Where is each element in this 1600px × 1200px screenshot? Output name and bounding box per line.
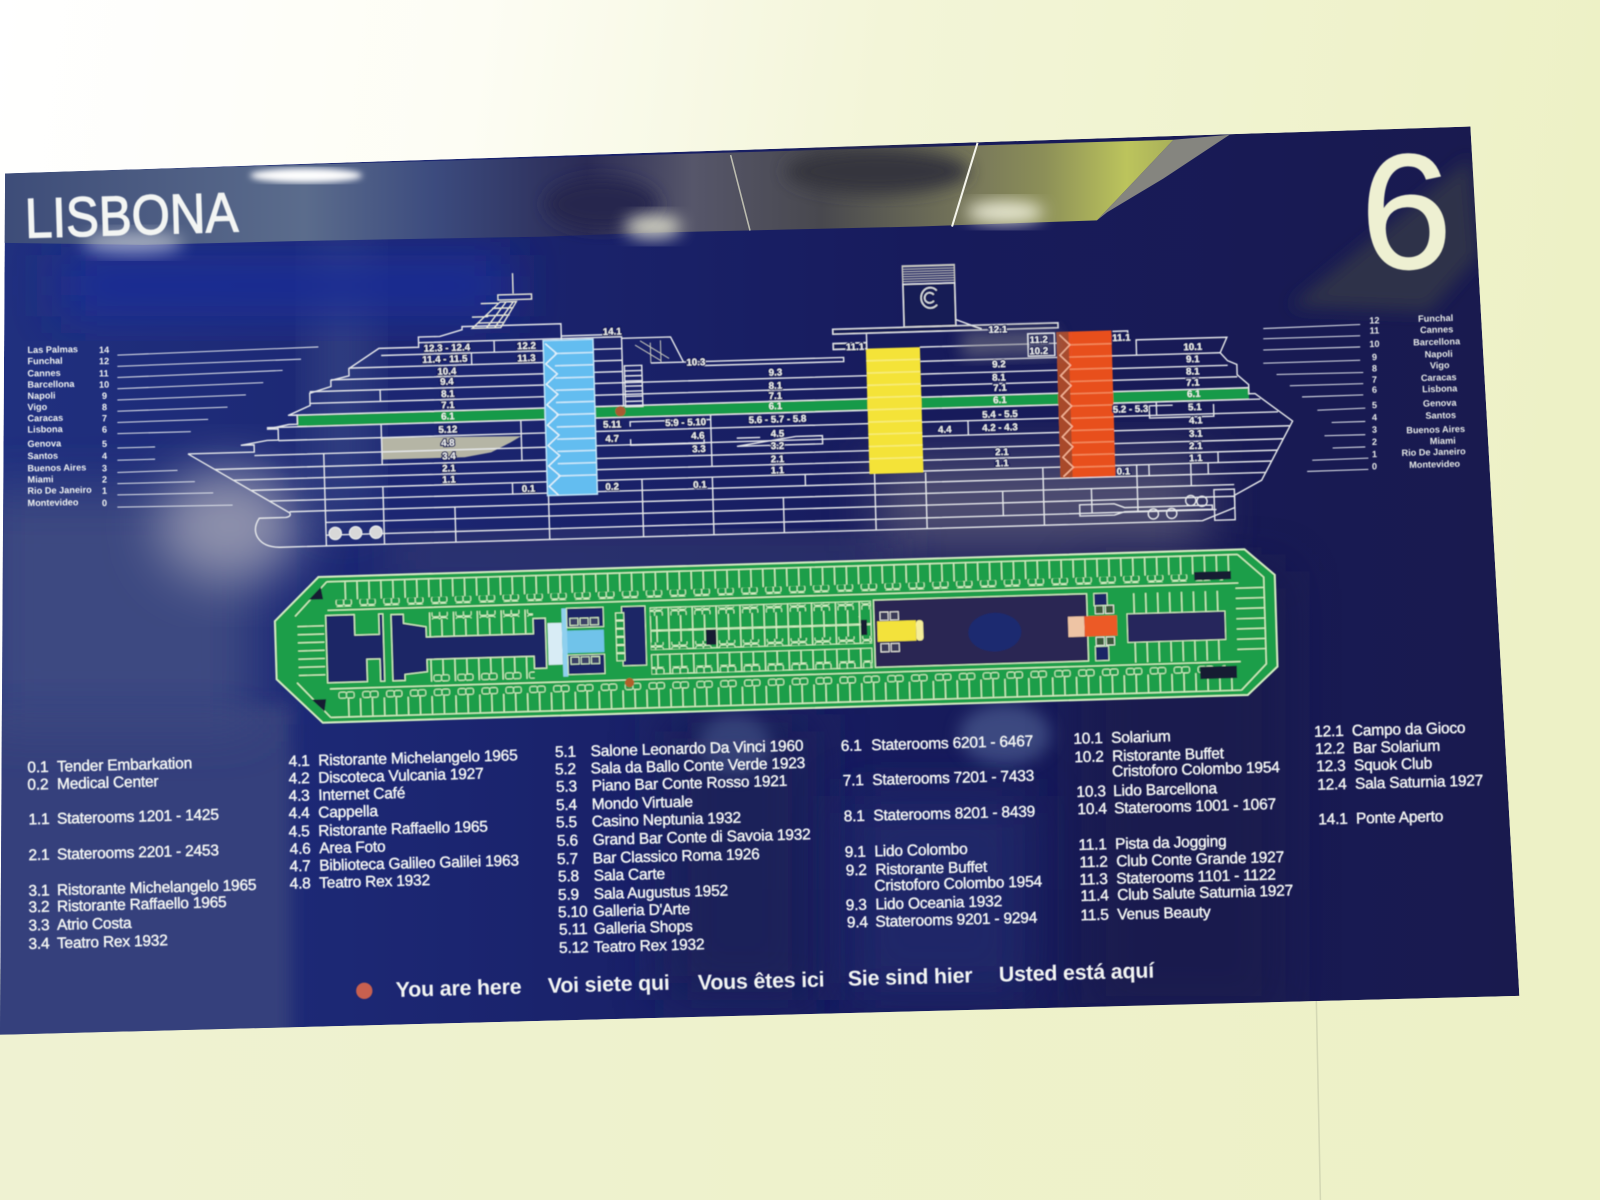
mid-ship cabin rows <box>650 601 872 674</box>
left deck index: ports and deck numbers: 9 <box>102 391 107 401</box>
ship deck labels: 4.8 <box>441 438 455 449</box>
deck lines <box>211 318 1292 538</box>
ship deck labels: 4.1 <box>1189 415 1203 427</box>
red stair zone on deck <box>1068 605 1118 646</box>
left deck index: ports and deck numbers: 4 <box>102 451 108 461</box>
list: decks 0 to 3: Ristorante Raffaello 1965 <box>57 894 227 915</box>
list: decks 12 and 14: Campo da Gioco <box>1352 720 1466 740</box>
ship deck labels: 3.1 <box>1189 429 1203 440</box>
right deck index: ports and deck numbers: Miami <box>1430 436 1456 446</box>
list: decks 10 and 11: Club Conte Grande 1927 <box>1116 849 1284 870</box>
right deck index: ports and deck numbers: Napoli <box>1425 349 1453 360</box>
list: decks 10 and 11: 10.2 <box>1074 748 1104 766</box>
list: decks 12 and 14 <box>1314 720 1483 828</box>
list: decks 10 and 11: 10.1 <box>1073 730 1103 748</box>
ship deck labels: 0.1 <box>693 480 707 491</box>
ship deck labels: 8.1 <box>992 372 1006 384</box>
ship deck labels: 2.1 <box>771 454 785 465</box>
list: deck 4: Discoteca Vulcania 1927 <box>318 766 484 787</box>
right deck index: ports and deck numbers: Rio De Janeiro <box>1401 446 1466 458</box>
list: decks 10 and 11: Staterooms 1101 - 1122 <box>1116 867 1276 888</box>
list: deck 4: 4.3 <box>288 787 310 805</box>
right deck index: ports and deck numbers: Lisbona <box>1422 383 1458 394</box>
list: deck 5: 5.6 <box>557 832 578 850</box>
list: decks 6 to 9: 9.2 <box>846 862 867 880</box>
ship deck labels: 14.1 <box>603 326 622 338</box>
hull outline <box>185 335 1295 550</box>
left deck index: ports and deck numbers: Napoli <box>27 390 56 401</box>
list: deck 4: Internet Café <box>318 785 405 804</box>
list: decks 12 and 14: 12.4 <box>1317 776 1347 794</box>
list: decks 0 to 3: Atrio Costa <box>57 915 132 934</box>
ship deck labels: 11.1 <box>1112 333 1131 344</box>
ship deck labels: 7.1 <box>769 391 783 402</box>
left deck index: ports and deck numbers: 2 <box>102 475 107 485</box>
list: decks 0 to 3: Staterooms 1201 - 1425 <box>57 807 219 828</box>
right deck index: ports and deck numbers <box>1263 313 1466 471</box>
list: decks 10 and 11: Ristorante Buffet <box>1112 745 1225 765</box>
list: deck 5: 5.2 <box>555 761 576 778</box>
list: decks 12 and 14: Bar Solarium <box>1353 738 1440 757</box>
list: deck 5: 5.5 <box>556 814 577 832</box>
ship deck labels: 8.1 <box>1186 366 1200 378</box>
ship deck labels: 4.7 <box>605 434 619 445</box>
ship deck labels: 7.1 <box>993 383 1007 394</box>
ship deck labels: 10.3 <box>686 357 706 369</box>
deck 4.8 theatre area <box>381 434 522 460</box>
right deck index: ports and deck numbers: 7 <box>1372 375 1377 385</box>
right deck index: ports and deck numbers: Santos <box>1425 410 1456 421</box>
right deck index: ports and deck numbers: Barcellona <box>1413 336 1461 348</box>
ship deck labels: 9.4 <box>440 376 454 388</box>
ship deck labels: 3.2 <box>771 441 784 452</box>
left deck index: ports and deck numbers: 1 <box>102 486 107 496</box>
legend: you are here in five languages: Usted está aquí <box>998 959 1155 987</box>
ship deck labels: 7.1 <box>441 400 455 411</box>
list: deck 4: 4.6 <box>289 841 311 858</box>
right deck index: ports and deck numbers: 10 <box>1369 339 1380 349</box>
list: decks 6 to 9: Lido Oceania 1932 <box>875 893 1002 913</box>
reflection of ceiling in top band <box>0 140 1173 245</box>
ship deck labels: 1.1 <box>995 458 1009 470</box>
left deck index: ports and deck numbers: 8 <box>102 402 107 412</box>
left deck index: ports and deck numbers: Funchal <box>27 356 63 366</box>
ship deck labels: 0.2 <box>605 482 619 493</box>
list: deck 4: 4.7 <box>289 858 311 875</box>
list: decks 10 and 11: Solarium <box>1111 728 1171 747</box>
mast and lattice <box>471 273 532 328</box>
list: decks 12 and 14: 12.1 <box>1314 723 1344 741</box>
list: decks 6 to 9: 9.3 <box>846 897 867 914</box>
left deck index: ports and deck numbers: Buenos Aires <box>27 462 86 473</box>
list: deck 4: 4.5 <box>288 823 310 841</box>
ship deck labels: 8.1 <box>769 381 783 392</box>
list: decks 10 and 11: Cristoforo Colombo 1954 <box>1112 759 1280 781</box>
right deck index: ports and deck numbers: Cannes <box>1420 324 1453 335</box>
list: decks 6 to 9: 8.1 <box>844 808 865 825</box>
list: deck 5: 5.11 <box>559 921 587 939</box>
list: deck 5: Bar Classico Roma 1926 <box>593 846 760 867</box>
right deck index: ports and deck numbers: 4 <box>1372 412 1378 422</box>
ship deck labels: 5.11 <box>603 419 622 431</box>
left deck index: ports and deck numbers: Caracas <box>27 413 63 423</box>
list: deck 5: Grand Bar Conte di Savoia 1932 <box>593 826 811 849</box>
ship deck labels: 5.12 <box>438 424 457 436</box>
room boxes <box>630 416 823 449</box>
list: deck 5: Sala Carte <box>594 866 665 885</box>
funnel deck structures <box>833 323 1059 350</box>
icon: red stair column <box>1056 330 1116 478</box>
list: decks 10 and 11: 11.1 <box>1078 836 1107 854</box>
right deck index: ports and deck numbers: 3 <box>1372 425 1377 435</box>
ship deck labels: 12.2 <box>517 341 536 352</box>
service block <box>615 606 647 666</box>
list: decks 6 to 9: Staterooms 7201 - 7433 <box>872 768 1034 789</box>
ship deck labels: 4.5 <box>771 429 785 440</box>
list: decks 6 to 9: Cristoforo Colombo 1954 <box>874 873 1043 895</box>
list: decks 10 and 11: 10.4 <box>1077 801 1107 818</box>
list: decks 0 to 3: 2.1 <box>28 847 50 864</box>
list: decks 6 to 9: Ristorante Buffet <box>875 859 988 879</box>
list: deck 5: Galleria Shops <box>594 918 693 938</box>
right deck index: ports and deck numbers: 1 <box>1372 449 1377 459</box>
ship deck labels: 1.1 <box>771 465 785 477</box>
left deck index: ports and deck numbers: Las Palmas <box>27 344 78 355</box>
ship deck labels: 5.1 <box>1188 402 1202 413</box>
ship deck labels: 2.1 <box>1189 441 1203 452</box>
ship deck labels: 0.1 <box>522 484 536 495</box>
list: decks 0 to 3: 3.1 <box>28 882 50 900</box>
list: decks 0 to 3 <box>27 755 257 953</box>
list: decks 12 and 14: 14.1 <box>1318 811 1348 828</box>
ship deck labels: 1.1 <box>1189 453 1203 464</box>
list: decks 0 to 3: Tender Embarkation <box>57 755 192 776</box>
central atrium void <box>873 594 1089 667</box>
ship deck labels: 1.1 <box>442 474 456 486</box>
list: deck 4: Ristorante Michelangelo 1965 <box>318 747 518 770</box>
right deck index: ports and deck numbers: 2 <box>1372 437 1377 447</box>
legend: you are here in five languages: Voi siete qui <box>547 971 670 998</box>
list: deck 5 <box>555 738 811 957</box>
list: deck 5: 5.9 <box>558 886 579 904</box>
list: decks 0 to 3: 3.4 <box>28 935 50 953</box>
list: deck 5: 5.8 <box>558 868 579 886</box>
list: decks 0 to 3: Medical Center <box>57 773 159 793</box>
right deck index: ports and deck numbers: 12 <box>1369 315 1380 326</box>
list: decks 0 to 3: 3.3 <box>28 917 50 935</box>
list: decks 12 and 14: Squok Club <box>1354 755 1432 774</box>
right deck index: ports and deck numbers: Montevideo <box>1409 459 1461 470</box>
list: deck 5: 5.7 <box>557 851 578 868</box>
ship deck labels: 2.1 <box>995 447 1009 458</box>
ship deck labels: 4.2 - 4.3 <box>982 422 1018 434</box>
ship deck labels: 11.1 <box>846 342 865 353</box>
list: deck 4 <box>288 747 519 893</box>
ship deck labels: 9.1 <box>1186 354 1200 365</box>
right deck index: ports and deck numbers: 8 <box>1372 363 1377 373</box>
deck outline <box>273 548 1278 724</box>
ship deck labels: 10.2 <box>1029 346 1048 357</box>
list: decks 12 and 14: Ponte Aperto <box>1356 808 1443 828</box>
list: deck 5: 5.10 <box>558 904 588 921</box>
ship deck labels: 3.4 <box>442 451 456 462</box>
list: deck 4: Cappella <box>318 803 379 822</box>
ship deck labels: 5.2 - 5.3 <box>1113 404 1149 416</box>
ship deck labels: 7.1 <box>1186 378 1200 389</box>
list: decks 6 to 9: 9.4 <box>847 914 868 932</box>
legend: you are here in five languages: Sie sind hier <box>847 963 973 991</box>
left deck index: ports and deck numbers: Montevideo <box>27 497 79 508</box>
list: deck 5: Sala da Ballo Conte Verde 1923 <box>590 755 805 778</box>
list: decks 6 to 9: Staterooms 6201 - 6467 <box>871 733 1033 754</box>
left deck index: ports and deck numbers: 10 <box>99 380 109 390</box>
list: decks 0 to 3: 0.2 <box>27 776 49 794</box>
icon: yellow stair column <box>866 347 924 474</box>
ship deck labels: 10.1 <box>1183 342 1203 353</box>
list: deck 4: Area Foto <box>319 839 386 857</box>
list: decks 6 to 9: 9.1 <box>845 844 866 861</box>
list: decks 12 and 14: 12.2 <box>1315 740 1345 758</box>
left deck index: ports and deck numbers: Lisbona <box>27 424 64 435</box>
left deck index: ports and deck numbers: 7 <box>102 413 107 423</box>
ship deck labels: 5.9 - 5.10 <box>665 417 706 429</box>
funnel <box>902 264 956 331</box>
right deck index: ports and deck numbers: Caracas <box>1421 372 1457 383</box>
list: deck 5: Mondo Virtuale <box>591 794 693 813</box>
right deck index: ports and deck numbers: 11 <box>1369 326 1379 336</box>
you are here marker on plan <box>625 678 634 687</box>
ship deck labels: 11.3 <box>517 353 536 364</box>
legend: you are here in five languages: Vous êtes ici <box>697 967 825 995</box>
left deck index: ports and deck numbers: 0 <box>102 498 107 508</box>
ship deck labels: 0.1 <box>1117 466 1131 478</box>
list: deck 4: 4.4 <box>288 805 310 822</box>
list: deck 5: Salone Leonardo Da Vinci 1960 <box>590 738 804 760</box>
left deck index: ports and deck numbers: Santos <box>27 451 58 461</box>
list: deck 4: Biblioteca Galileo Galilei 1963 <box>319 852 519 875</box>
you are here marker on ship <box>615 406 626 416</box>
yellow stair zone on deck <box>877 611 924 652</box>
list: decks 0 to 3: 1.1 <box>28 811 50 828</box>
list: decks 10 and 11: 11.5 <box>1080 907 1109 924</box>
legend: you are here in five languages <box>356 959 1155 1002</box>
outer cabin rows <box>294 554 1267 718</box>
list: decks 6 to 9: Staterooms 8201 - 8439 <box>873 803 1035 825</box>
list: decks 0 to 3: 0.1 <box>27 759 49 776</box>
left deck index: ports and deck numbers <box>27 344 318 508</box>
left deck index: ports and deck numbers: Rio De Janeiro <box>27 485 92 496</box>
ship deck labels: 5.4 - 5.5 <box>982 409 1018 421</box>
ship deck labels: 12.1 <box>988 324 1008 336</box>
left deck index: ports and deck numbers: Genova <box>27 438 62 449</box>
ship deck labels: 3.3 <box>692 444 706 455</box>
left deck index: ports and deck numbers: 11 <box>99 368 109 379</box>
ship deck labels: 5.6 - 5.7 - 5.8 <box>749 414 807 426</box>
ship deck labels: 6.1 <box>1187 389 1201 400</box>
ladder <box>624 365 643 407</box>
title: Lisbona: LISBONA <box>24 180 240 250</box>
list: decks 10 and 11: Staterooms 1001 - 1067 <box>1114 796 1276 817</box>
list: decks 6 to 9: 6.1 <box>840 737 862 755</box>
list: deck 5: 5.4 <box>556 797 577 814</box>
forward dark voids <box>326 609 547 683</box>
legend: you are here in five languages: You are here <box>395 975 522 1002</box>
list: decks 0 to 3: Teatro Rex 1932 <box>57 932 168 952</box>
reflection glare on the board <box>0 158 1479 1051</box>
left deck index: ports and deck numbers: Cannes <box>27 368 61 379</box>
list: deck 4: Ristorante Raffaello 1965 <box>318 819 488 840</box>
list: deck 5: Teatro Rex 1932 <box>594 936 705 956</box>
list: deck 5: 5.12 <box>559 939 589 957</box>
list: deck 4: 4.2 <box>288 770 310 788</box>
list: decks 6 to 9: Lido Colombo <box>874 841 968 860</box>
propulsion gear <box>1079 489 1235 524</box>
list: decks 10 and 11: 11.4 <box>1080 887 1109 905</box>
list: decks 10 and 11: Pista da Jogging <box>1115 833 1227 853</box>
bow thrusters <box>329 526 382 540</box>
right deck index: ports and deck numbers: Buenos Aires <box>1406 424 1465 435</box>
list: deck 5: Casino Neptunia 1932 <box>591 810 741 831</box>
ship deck labels: 10.4 <box>437 366 457 378</box>
vertical bulkheads <box>321 319 1220 546</box>
left deck index: ports and deck numbers: 12 <box>99 356 109 366</box>
icon: blue stair column <box>543 339 597 496</box>
list: deck 4: 4.8 <box>289 875 311 893</box>
list: decks 10 and 11: 11.2 <box>1079 854 1108 871</box>
left deck index: ports and deck numbers: 3 <box>102 463 107 473</box>
right deck index: ports and deck numbers: Vigo <box>1430 360 1450 371</box>
list: decks 10 and 11: Club Salute Saturnia 1927 <box>1117 882 1293 904</box>
list: decks 10 and 11: 10.3 <box>1076 783 1106 801</box>
superstructure profile <box>185 324 564 454</box>
list: decks 6 to 9: Staterooms 9201 - 9294 <box>875 910 1038 931</box>
reflected oval <box>968 612 1022 652</box>
right deck index: ports and deck numbers: 9 <box>1372 352 1377 362</box>
blue stair zone on deck <box>547 607 605 677</box>
right deck index: ports and deck numbers: 5 <box>1372 400 1377 410</box>
list: decks 6 to 9: 7.1 <box>843 772 864 790</box>
left deck index: ports and deck numbers: Barcellona <box>27 379 75 390</box>
list: decks 10 and 11: 11.3 <box>1079 871 1108 889</box>
list: deck 4: Teatro Rex 1932 <box>319 872 430 892</box>
list: decks 10 and 11 <box>1073 728 1293 924</box>
list: deck 5: Galleria D'Arte <box>593 901 690 920</box>
ship deck labels <box>422 324 1203 495</box>
list: deck 5: 5.1 <box>555 744 576 761</box>
list: deck 4: 4.1 <box>288 753 310 770</box>
right deck index: ports and deck numbers: 6 <box>1372 385 1377 395</box>
ship deck labels: 11.2 <box>1029 335 1048 346</box>
deck number 6: 6 <box>1358 119 1454 304</box>
panel: navy sign board <box>0 127 1519 1051</box>
list: decks 12 and 14: Sala Saturnia 1927 <box>1355 772 1483 793</box>
ship deck labels: 6.1 <box>769 401 783 412</box>
list: decks 12 and 14: 12.3 <box>1316 758 1346 775</box>
list: deck 5: Sala Augustus 1952 <box>594 883 728 903</box>
right deck index: ports and deck numbers: 0 <box>1372 461 1377 471</box>
list: decks 0 to 3: 3.2 <box>28 899 50 916</box>
list: deck 5: Piano Bar Conte Rosso 1921 <box>591 773 787 795</box>
list: decks 10 and 11: Venus Beauty <box>1117 904 1211 923</box>
list: decks 6 to 9 <box>840 733 1043 932</box>
ship deck labels: 4.6 <box>691 431 705 442</box>
ship deck labels: 6.1 <box>441 411 455 423</box>
left deck index: ports and deck numbers: Miami <box>27 474 54 485</box>
ship deck labels: 4.4 <box>938 424 952 436</box>
left deck index: ports and deck numbers: 14 <box>99 345 110 355</box>
list: decks 10 and 11: Lido Barcellona <box>1113 780 1218 800</box>
list: decks 0 to 3: Ristorante Michelangelo 1965 <box>57 877 257 899</box>
ship deck labels: 9.2 <box>992 359 1006 371</box>
deck 6 plan <box>273 548 1278 724</box>
ship deck labels: 12.3 - 12.4 <box>424 342 471 355</box>
left deck index: ports and deck numbers: 5 <box>102 439 107 449</box>
ship deck labels: 6.1 <box>993 395 1007 406</box>
left deck index: ports and deck numbers: 6 <box>102 425 107 435</box>
deck 6 green band <box>297 388 1249 427</box>
left deck index: ports and deck numbers: Vigo <box>27 402 48 412</box>
ship deck labels: 11.4 - 11.5 <box>422 354 468 366</box>
ship cross-section <box>183 251 1295 550</box>
aft void and cabins <box>1093 571 1237 682</box>
ship deck labels: 8.1 <box>441 389 455 400</box>
right deck index: ports and deck numbers: Genova <box>1423 398 1458 409</box>
forward cabins <box>426 609 535 682</box>
list: deck 5: 5.3 <box>556 778 577 796</box>
ship deck labels: 2.1 <box>442 463 456 475</box>
ship deck labels: 9.3 <box>769 367 783 379</box>
right deck index: ports and deck numbers: Funchal <box>1418 313 1453 324</box>
list: decks 0 to 3: Staterooms 2201 - 2453 <box>57 842 219 863</box>
